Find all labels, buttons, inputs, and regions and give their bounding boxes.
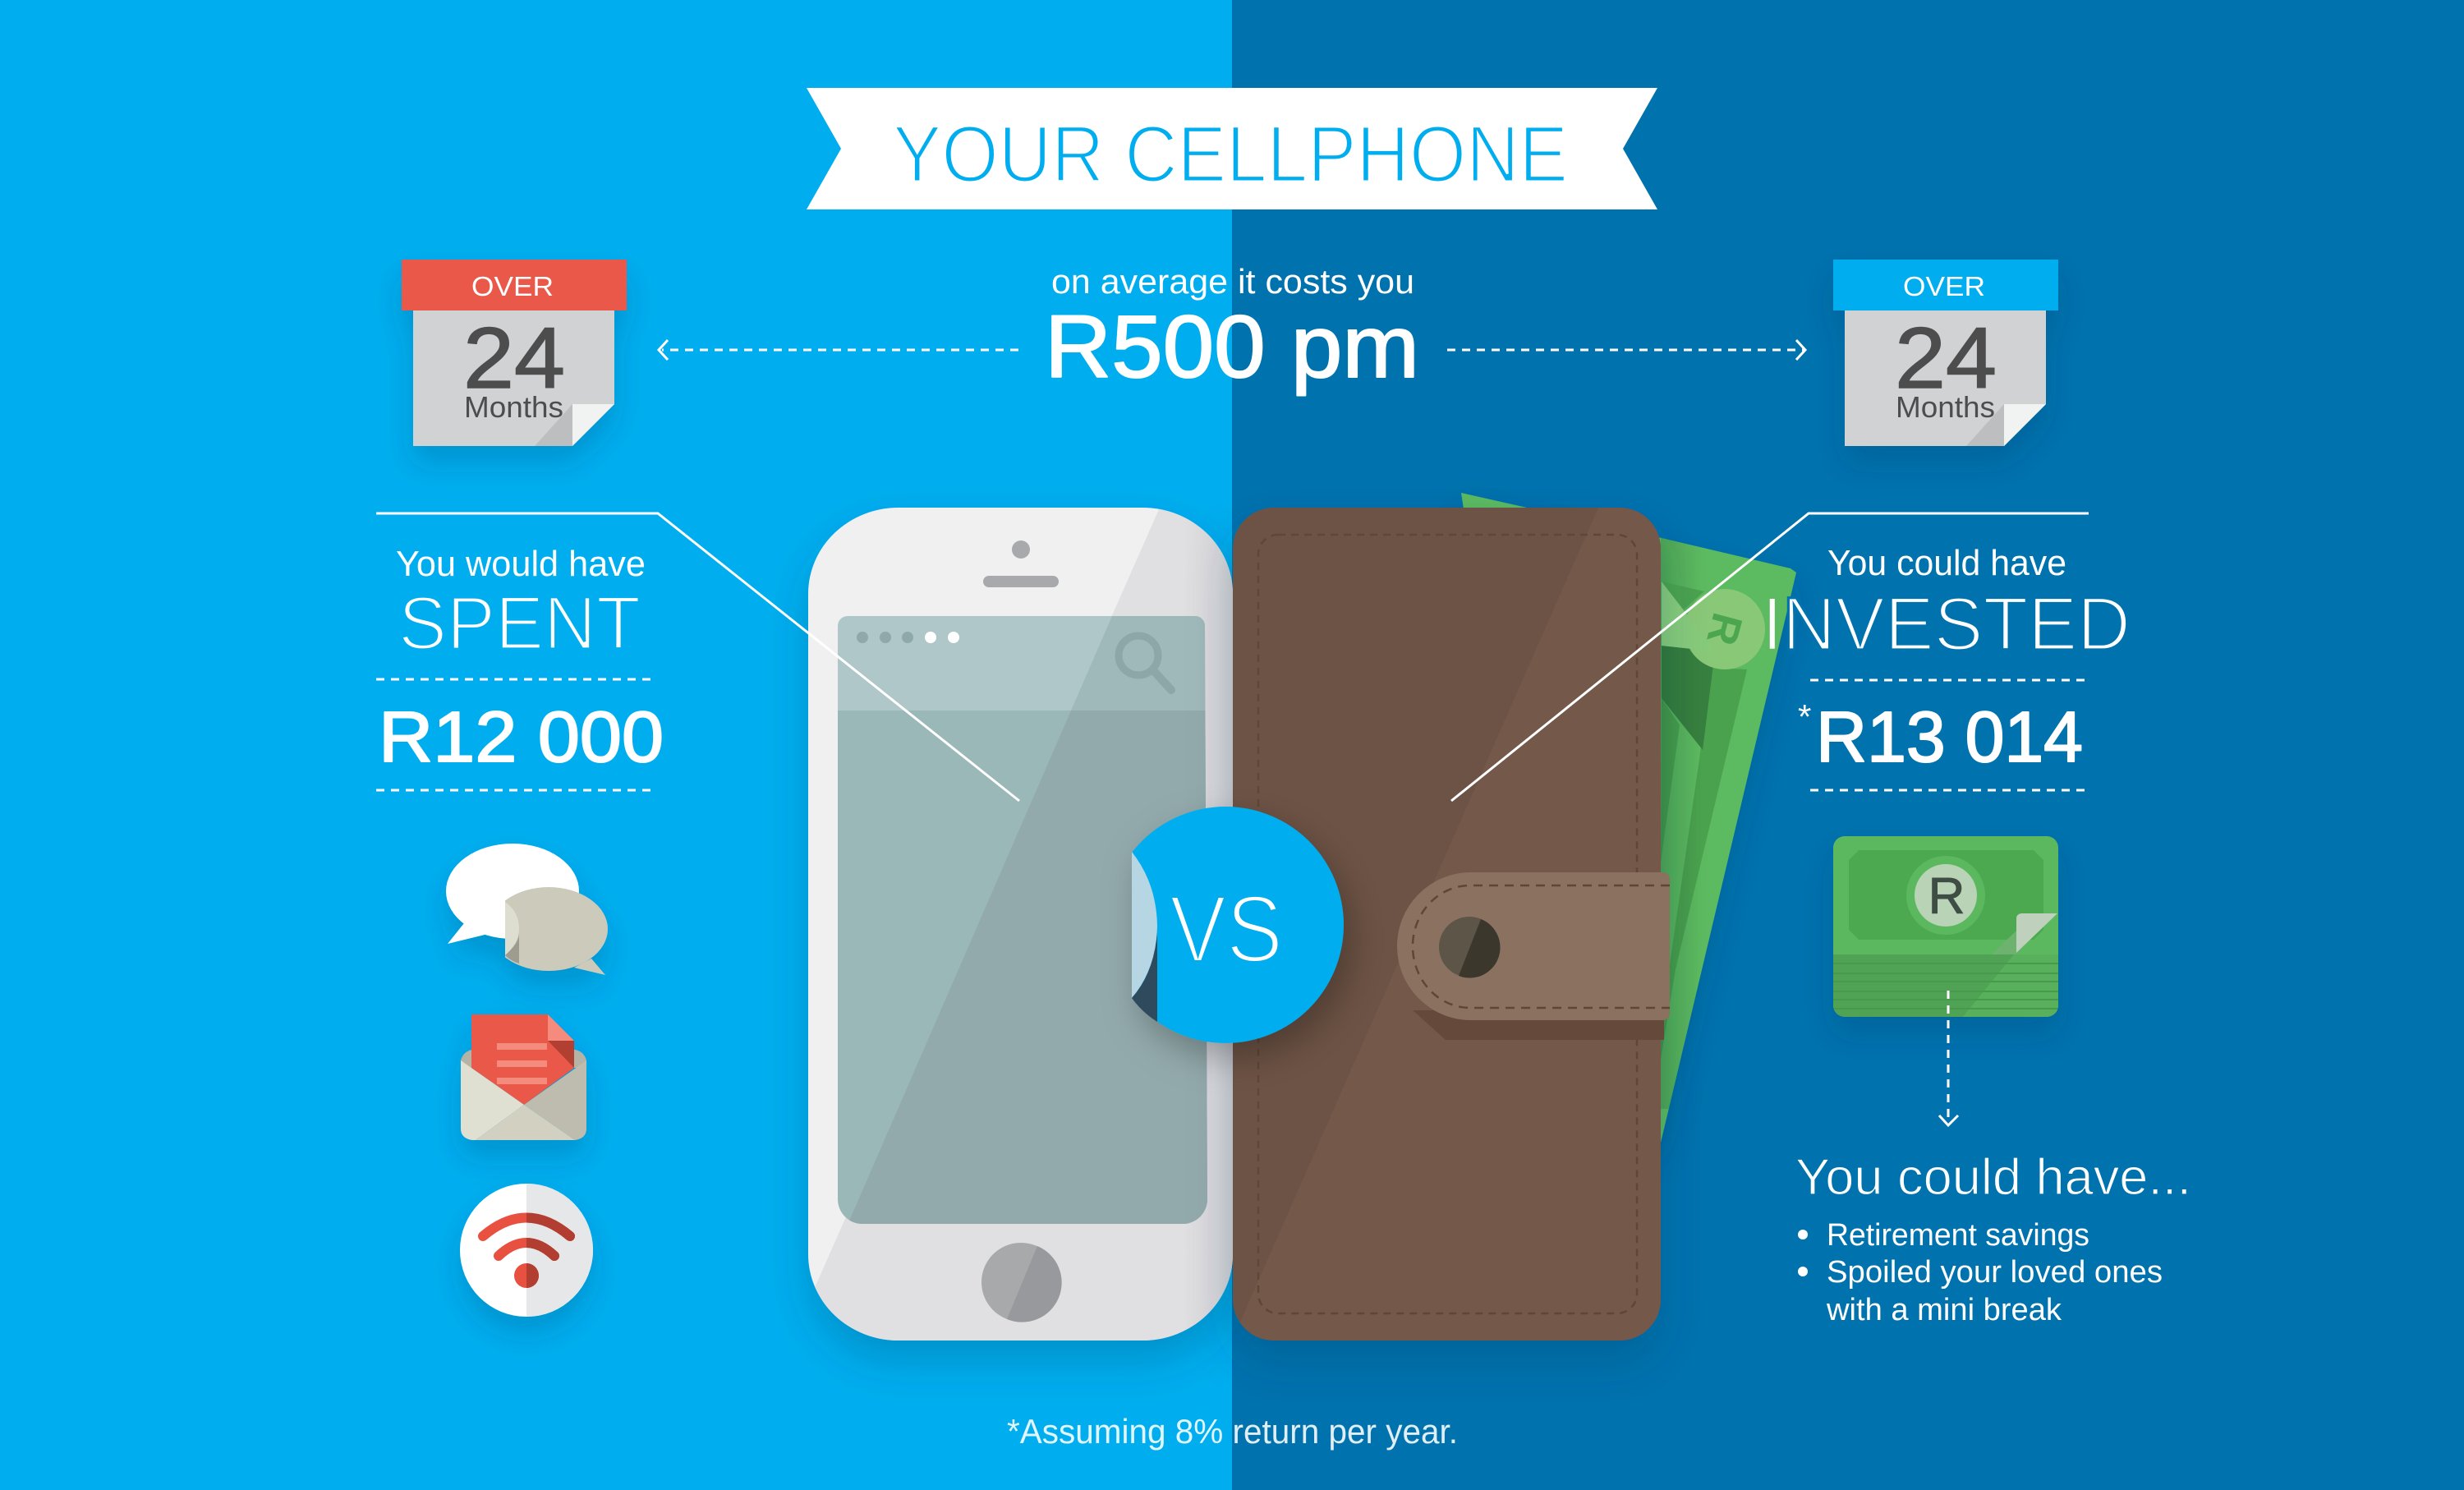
arrow: cost to right calendar — [1447, 340, 1805, 360]
clasp button — [1439, 917, 1500, 977]
arrow: stack to you could have — [1939, 991, 1958, 1125]
list: benefits: Retirement savings — [1827, 1218, 2089, 1253]
left text: you would have spent: R12 000 — [379, 697, 664, 777]
right text: you could have invested: NVESTED — [1782, 582, 2131, 666]
icon: stack of banknotes — [1833, 836, 2058, 1017]
background: right panel — [1232, 0, 2464, 1490]
right text: you could have invested: You could have — [1827, 543, 2066, 583]
title banner — [807, 88, 1657, 209]
icon: search — [1119, 636, 1171, 690]
right text: you could have invested — [1762, 543, 2131, 790]
calendar: left, over 24 months: OVER — [471, 271, 554, 301]
list: benefits: with a mini break — [1826, 1293, 2062, 1327]
right text: you could have invested: * — [1798, 697, 1811, 736]
arrow: cost to left calendar — [659, 340, 1018, 360]
right text: you could have invested: I — [1762, 582, 1783, 666]
badge: VS — [1107, 807, 1344, 1043]
calendar: right, over 24 months: 24 — [1895, 310, 1997, 407]
calendar: right, over 24 months — [1833, 260, 2058, 446]
icon: stack of banknotes: R — [1928, 868, 1965, 925]
leader line: wallet to invested — [1451, 513, 2089, 801]
left text: you would have spent — [376, 544, 664, 790]
phone screen — [830, 608, 1216, 1236]
earpiece and camera — [983, 540, 1059, 587]
subheading: on average it costs you: on average it costs you — [1051, 262, 1414, 301]
list: benefits — [1798, 1218, 2163, 1327]
list: benefits: Spoiled your loved ones — [1827, 1255, 2163, 1290]
left text: you would have spent: You would have — [396, 544, 646, 584]
home button — [981, 1243, 1062, 1322]
folded corner — [2016, 913, 2057, 953]
status dots — [857, 632, 959, 643]
icon: envelope with letter — [461, 1014, 586, 1140]
left text: you would have spent: SPENT — [398, 582, 641, 665]
calendar: left, over 24 months: 24 — [463, 310, 565, 407]
calendar: left, over 24 months — [402, 260, 627, 446]
calendar: right, over 24 months: Months — [1896, 390, 1995, 424]
icon: speech bubbles — [446, 844, 608, 975]
footnote: *Assuming 8% return per year. — [1007, 1412, 1458, 1451]
banknotes behind wallet: R — [1697, 608, 1751, 650]
wallet clasp — [1397, 872, 1670, 1040]
phone — [780, 508, 1233, 1341]
background: left panel — [0, 0, 1232, 1490]
wallet stitching — [1258, 535, 1637, 1313]
monthly cost: R500 pm — [1045, 297, 1419, 396]
icon: wifi — [460, 1184, 593, 1317]
wallet — [1232, 508, 1670, 1341]
leader line: phone to spent — [376, 513, 1019, 801]
title: YOUR CELLPHONE — [893, 109, 1568, 199]
right text: you could have invested: R13 014 — [1816, 697, 2083, 777]
calendar: left, over 24 months: Months — [464, 390, 563, 424]
calendar: right, over 24 months: OVER — [1903, 271, 1985, 301]
banknote seal — [1685, 589, 1765, 669]
banknotes behind wallet — [1461, 493, 1796, 1143]
badge: VS: VS — [1170, 876, 1283, 982]
heading: you could have: You could have... — [1795, 1149, 2191, 1206]
